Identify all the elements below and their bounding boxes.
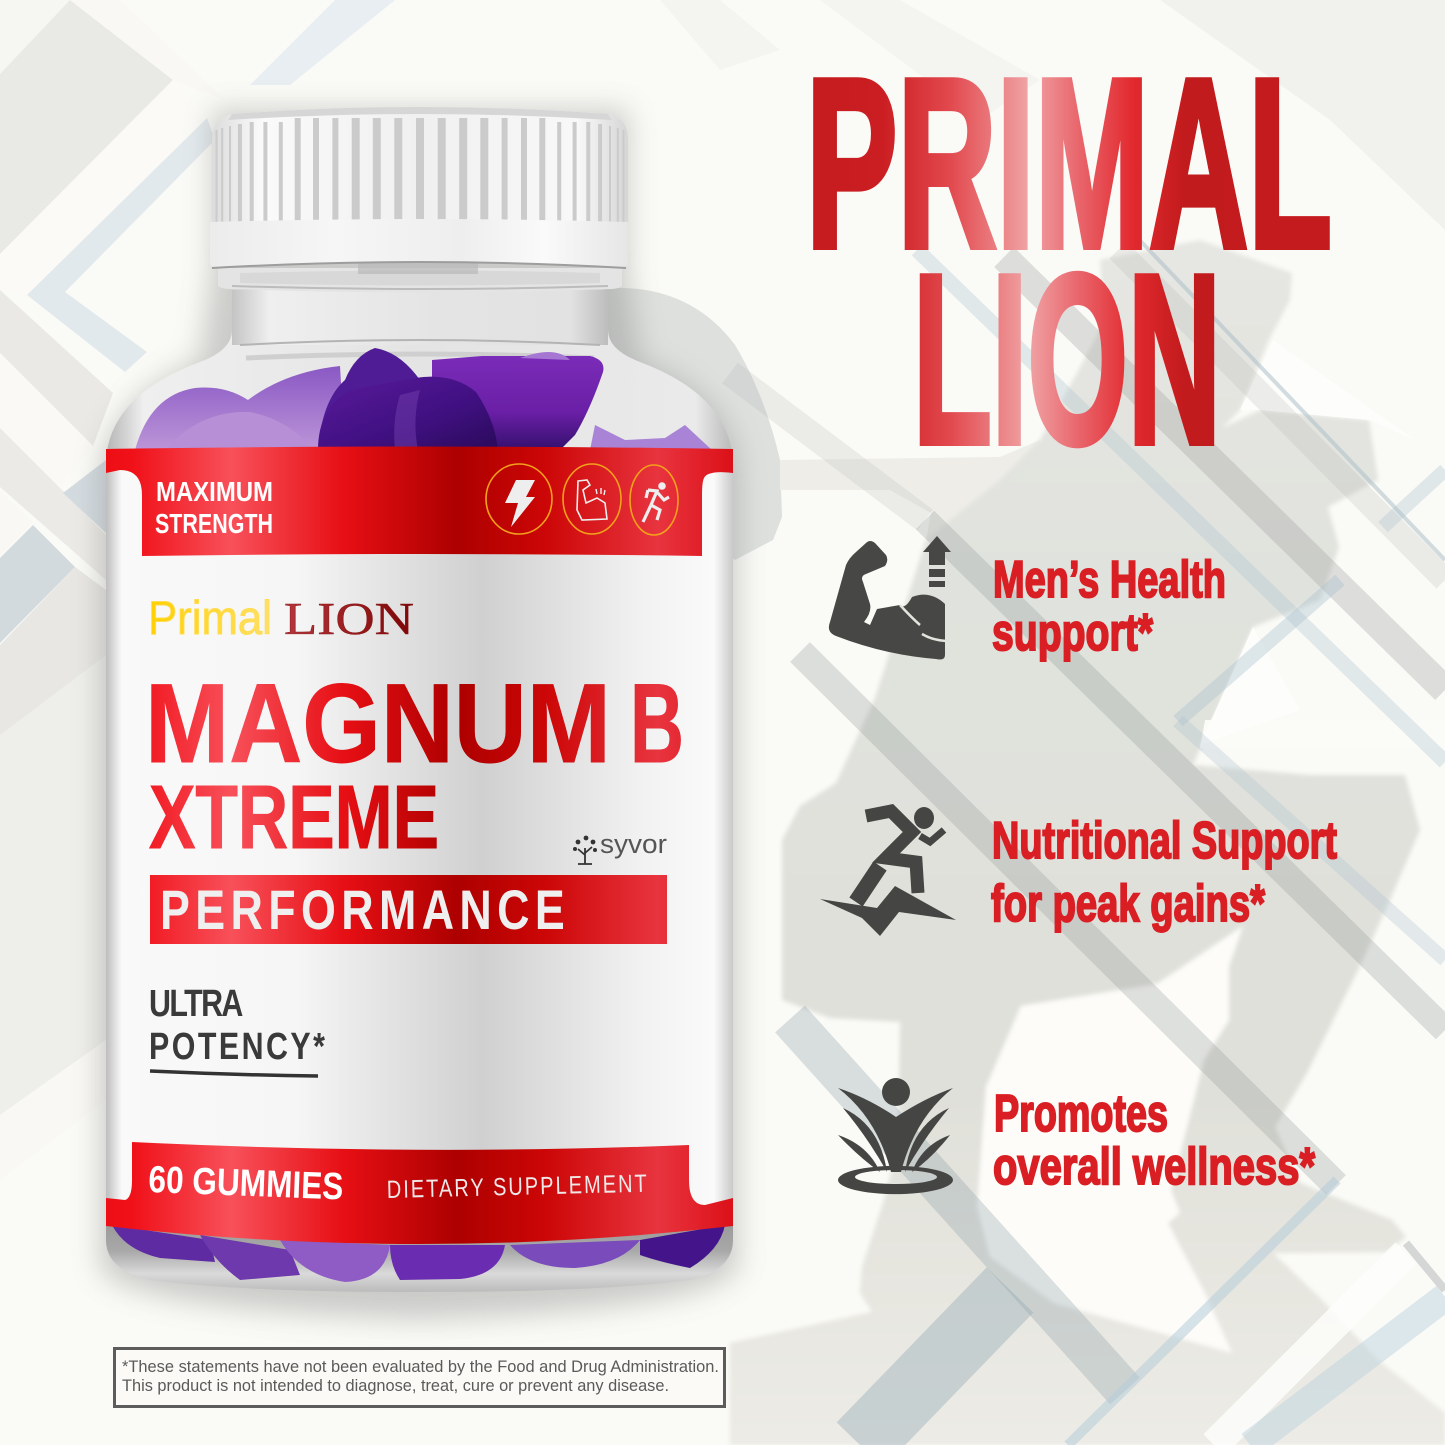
icon: runner in circle [630, 465, 678, 535]
syvor logo: syvor [600, 829, 667, 859]
maximum strength badge text [155, 476, 273, 539]
benefit: overall wellness [838, 1078, 1316, 1196]
bottom red band [106, 1142, 733, 1244]
bottom red band: DIETARY SUPPLEMENT [386, 1170, 647, 1204]
ultra potency: ULTRA [149, 983, 243, 1025]
diagonal grey and blue bands [730, 230, 1445, 1445]
bottle shadow [100, 110, 738, 1320]
top gummies [135, 348, 712, 450]
product name [145, 661, 684, 868]
performance banner: PERFORMANCE [160, 878, 565, 941]
icon: muscular arm with up arrow [829, 536, 951, 660]
disclaimer box: This product is not intended to diagnose, treat, cure or prevent any disease. [122, 1377, 669, 1395]
icon: runner [820, 807, 956, 936]
cap ribs [216, 118, 624, 222]
benefit: men's health: Men’s Health [993, 551, 1226, 609]
icon: flexed arm in circle [563, 464, 621, 534]
bottle cap [210, 107, 628, 268]
weight plate silhouette [535, 288, 782, 560]
brand name: LION [284, 593, 414, 644]
title [806, 30, 1332, 494]
benefit: overall wellness: Promotes [994, 1085, 1168, 1143]
benefit: overall wellness: overall wellness* [993, 1138, 1316, 1196]
brand name: Primal [148, 591, 272, 644]
barbell bar [780, 440, 1050, 540]
product name: B [630, 661, 684, 786]
maximum strength badge text: STRENGTH [155, 508, 273, 539]
bottle glass shoulder and neck [106, 262, 733, 460]
benefit: men's health [829, 536, 1226, 662]
disclaimer box: *These statements have not been evaluated by the Food and Drug Administration. [122, 1358, 719, 1376]
pale geometric panels, top [250, 0, 1445, 230]
product name: MAGNUM [145, 661, 611, 786]
top red band [106, 446, 733, 556]
bottle label [106, 446, 733, 1244]
label white body [106, 470, 733, 1225]
benefit: nutritional support [820, 807, 1337, 936]
benefit: men's health: support* [992, 604, 1154, 662]
bottom red band: 60 GUMMIES [148, 1159, 344, 1208]
icon: wellness figure [838, 1078, 953, 1194]
icon: lightning in circle [486, 464, 552, 534]
benefit: nutritional support: for peak gains* [991, 875, 1266, 933]
bottom glass with gummies [106, 1226, 733, 1292]
disclaimer box [114, 1348, 724, 1406]
product bottle [106, 107, 733, 1292]
lifter silhouette [730, 240, 1445, 1445]
maximum strength badge text: MAXIMUM [156, 476, 273, 507]
brand name [148, 591, 414, 644]
product name: XTREME [149, 768, 439, 868]
ultra potency: POTENCY* [149, 1026, 326, 1068]
ultra potency [149, 983, 326, 1076]
pale geometric panels, left [0, 0, 225, 1180]
syvor logo [573, 829, 667, 864]
